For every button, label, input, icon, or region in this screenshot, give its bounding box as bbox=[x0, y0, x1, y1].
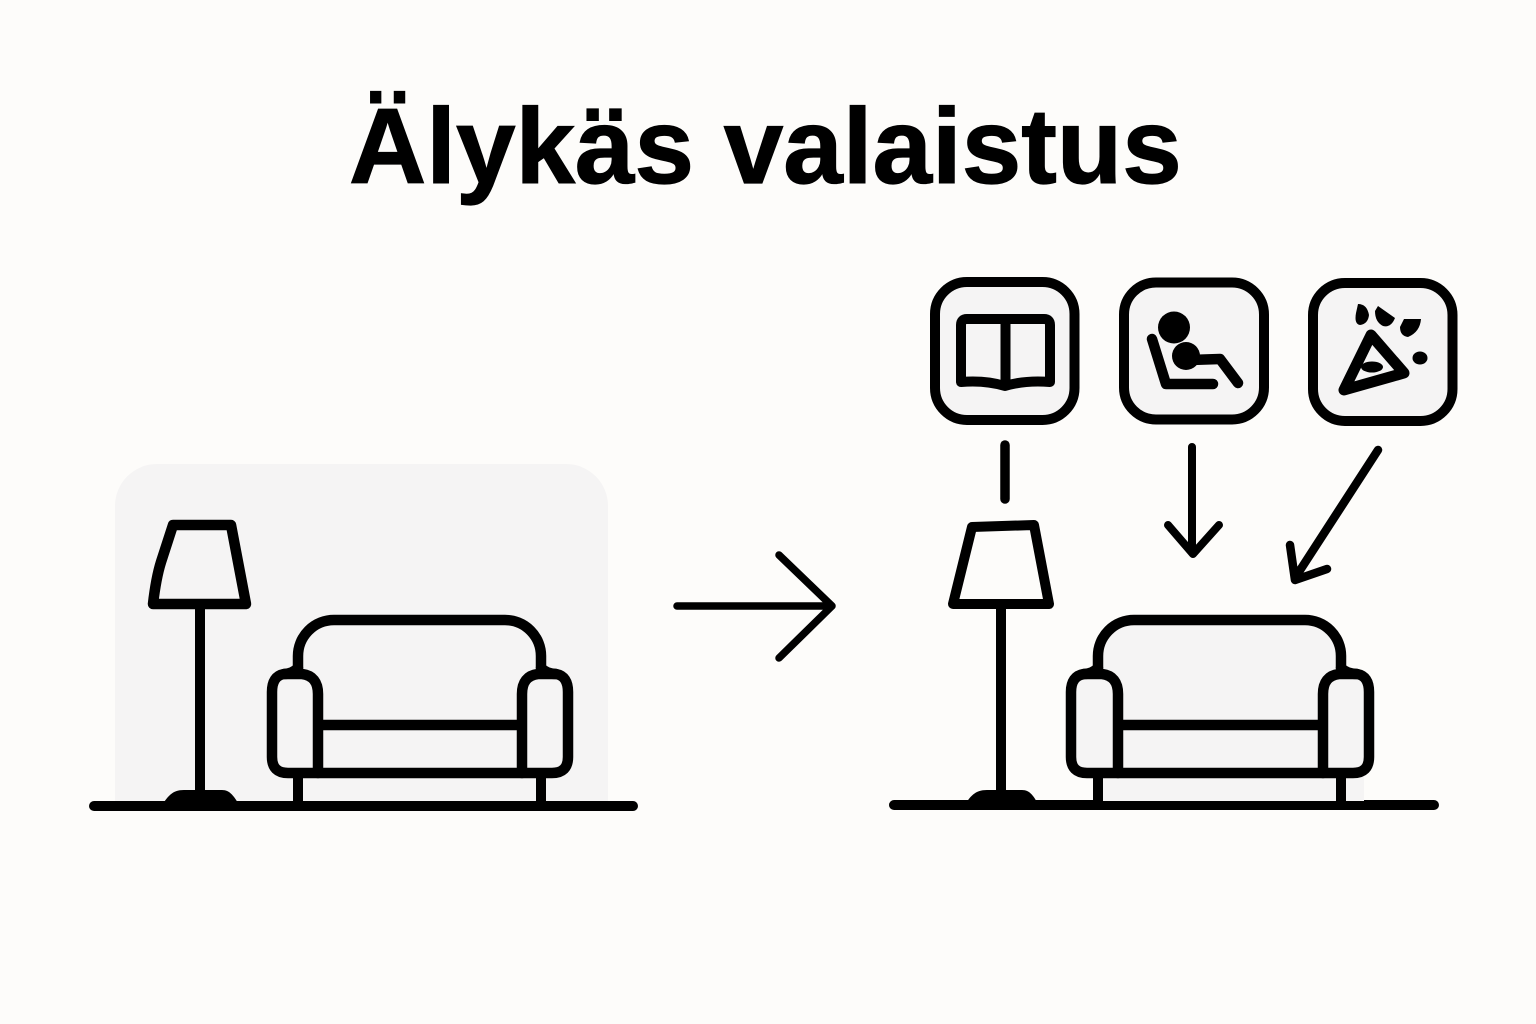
sofa bbox=[1071, 620, 1369, 805]
arrow: relaxing to sofa bbox=[1168, 447, 1219, 554]
floor lamp bbox=[153, 525, 246, 808]
background panel bbox=[115, 464, 608, 802]
icon: book mode bbox=[935, 282, 1074, 420]
sofa bbox=[272, 620, 568, 805]
panel: left room scene bbox=[94, 464, 633, 808]
floor line bbox=[894, 800, 1434, 810]
panel: right room scene bbox=[894, 525, 1434, 808]
connector: book to lamp bbox=[1000, 445, 1010, 499]
icon: party mode bbox=[1313, 283, 1452, 421]
title: Älykäs valaistus bbox=[349, 86, 1182, 206]
arrow: before to after bbox=[677, 555, 832, 658]
arrow: party to sofa bbox=[1290, 450, 1378, 580]
floor line bbox=[94, 801, 633, 811]
floor lamp bbox=[953, 525, 1049, 808]
icon: relaxing mode bbox=[1124, 282, 1264, 420]
